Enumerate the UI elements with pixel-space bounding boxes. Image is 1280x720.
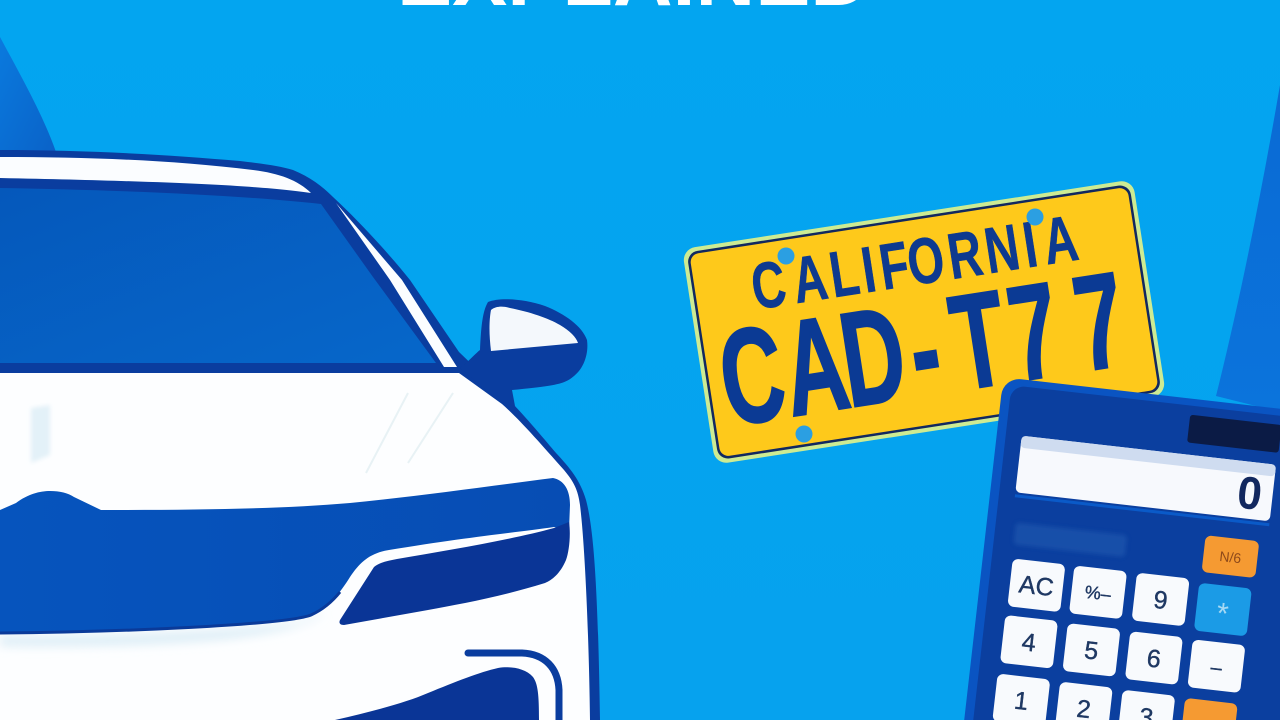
key 1: 1: [1013, 687, 1030, 716]
key 9: 9: [1152, 586, 1169, 615]
calculator: [956, 377, 1280, 720]
key 4: [1000, 615, 1058, 669]
key 1: [992, 673, 1050, 720]
key 6: 6: [1145, 644, 1162, 674]
key AC: [1007, 558, 1065, 612]
roof highlight: [0, 157, 311, 193]
calculator face: [965, 385, 1280, 720]
plate face: [689, 187, 1159, 457]
windshield: [0, 188, 436, 363]
orange key: N/6: [1219, 548, 1242, 566]
display underline: [1015, 494, 1269, 526]
key minus: –: [1209, 657, 1224, 680]
key multiply: *: [1215, 597, 1230, 631]
state name: CALIFORNIA: [746, 203, 1083, 324]
grille lower edge: [0, 592, 340, 633]
grille shadow: [0, 612, 325, 646]
display: [1015, 436, 1276, 522]
keypad: [992, 558, 1252, 720]
lower grille: [335, 667, 539, 720]
plate border: [682, 179, 1166, 465]
key percent: [1069, 565, 1127, 619]
car: [0, 150, 600, 720]
key 4: 4: [1020, 628, 1037, 658]
hood: [0, 373, 590, 720]
orange key: [1202, 535, 1259, 578]
key 5: 5: [1083, 636, 1100, 666]
background shape: right: [1216, 85, 1280, 412]
faded label band: [1013, 523, 1127, 557]
key 5: [1062, 623, 1121, 677]
plate number: CAD-T77: [710, 244, 1135, 456]
bumper line: [468, 653, 559, 720]
display digit: 0: [1235, 466, 1265, 520]
calculator body: [956, 377, 1280, 720]
headlight: [339, 522, 570, 625]
mirror glass: [490, 307, 578, 351]
mirror housing: [460, 299, 587, 406]
key multiply: [1194, 583, 1252, 636]
plate inner line: [687, 184, 1161, 460]
key minus: [1187, 639, 1245, 693]
side mirror: [460, 299, 587, 406]
license plate: [682, 179, 1166, 465]
key 3: [1117, 690, 1175, 720]
key AC: AC: [1017, 570, 1055, 602]
key 6: [1125, 631, 1183, 685]
key 2: [1055, 682, 1113, 720]
hood reflections: [31, 393, 453, 473]
key 9: [1132, 573, 1190, 626]
key orange lower: [1180, 698, 1238, 720]
key percent: %–: [1084, 582, 1112, 605]
solar panel: [1187, 415, 1280, 453]
windshield pillar highlight: [336, 203, 457, 367]
car body outline: [0, 150, 600, 720]
plate bolt holes: [778, 208, 1044, 442]
grille band: [0, 478, 570, 634]
background shape: left: [0, 37, 56, 152]
